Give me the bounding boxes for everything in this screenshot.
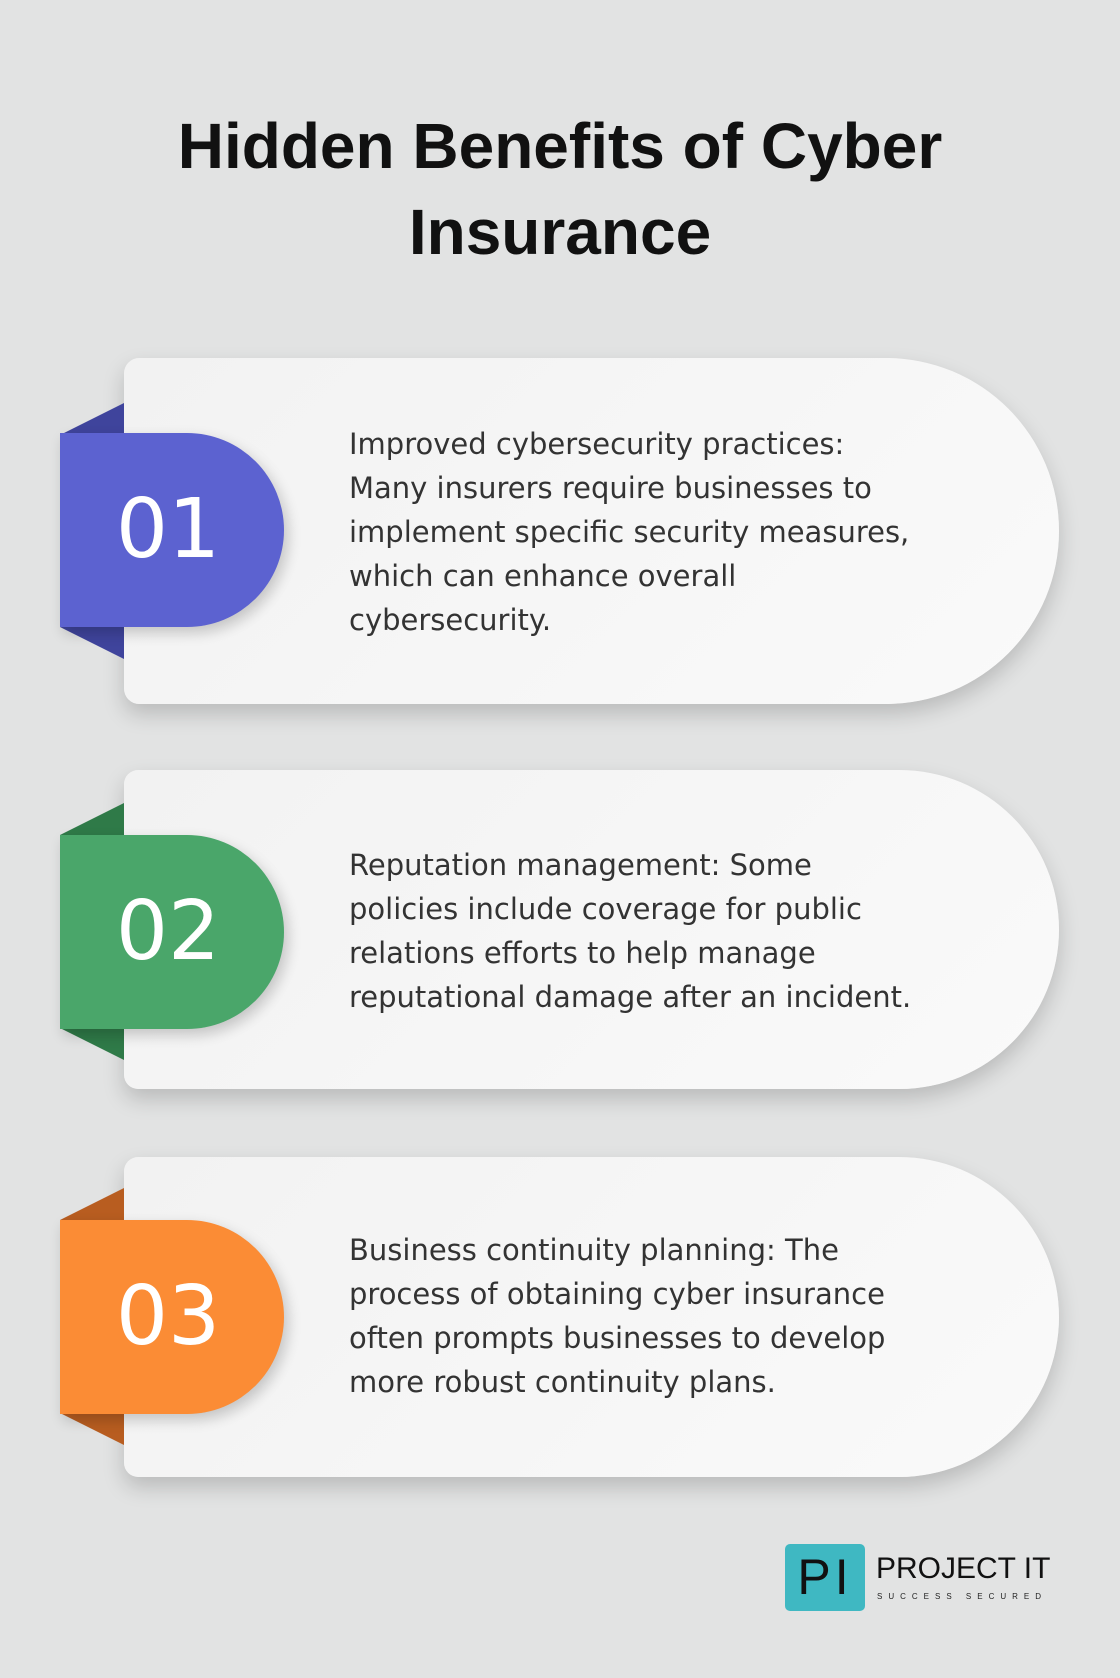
text 1	[349, 427, 909, 637]
text 1: Many insurers require businesses to	[349, 471, 872, 505]
logo	[785, 1544, 1050, 1611]
logo icon: PI	[797, 1549, 853, 1605]
title	[178, 110, 942, 268]
text 2: policies include coverage for public	[349, 892, 862, 926]
text 1: implement specific security measures,	[349, 515, 909, 549]
text 1: Improved cybersecurity practices:	[349, 427, 844, 461]
badge 03	[60, 1220, 284, 1414]
panel: card 2	[124, 770, 1059, 1089]
badge 03: 03	[116, 1269, 220, 1364]
text 3: process of obtaining cyber insurance	[349, 1277, 885, 1311]
badge 02: 02	[116, 884, 220, 979]
text 3: Business continuity planning: The	[349, 1233, 839, 1267]
badge 02	[60, 835, 284, 1029]
panel: card 1	[124, 358, 1059, 704]
fold 1 top	[64, 403, 124, 433]
badge 01	[60, 433, 284, 627]
text 1: cybersecurity.	[349, 603, 551, 637]
fold 3 top	[60, 1188, 124, 1220]
text 2: relations efforts to help manage	[349, 936, 816, 970]
logo: SUCCESS SECURED	[877, 1592, 1047, 1601]
fold 2 top	[60, 803, 124, 835]
text 2: reputational damage after an incident.	[349, 980, 911, 1014]
fold 1 bottom	[60, 627, 124, 659]
logo text: PROJECT IT	[876, 1552, 1050, 1585]
logo icon	[785, 1544, 865, 1611]
text 2	[349, 848, 911, 1014]
text 3	[349, 1233, 885, 1399]
fold 2 bottom	[62, 1029, 124, 1060]
text 3: more robust continuity plans.	[349, 1365, 776, 1399]
title: Hidden Benefits of Cyber	[178, 110, 942, 182]
text 1: which can enhance overall	[349, 559, 736, 593]
badge 01: 01	[116, 482, 220, 577]
panel: card 3	[124, 1157, 1059, 1477]
text 2: Reputation management: Some	[349, 848, 812, 882]
text 3: often prompts businesses to develop	[349, 1321, 885, 1355]
title: Insurance	[409, 196, 711, 268]
fold 3 bottom	[62, 1414, 124, 1445]
